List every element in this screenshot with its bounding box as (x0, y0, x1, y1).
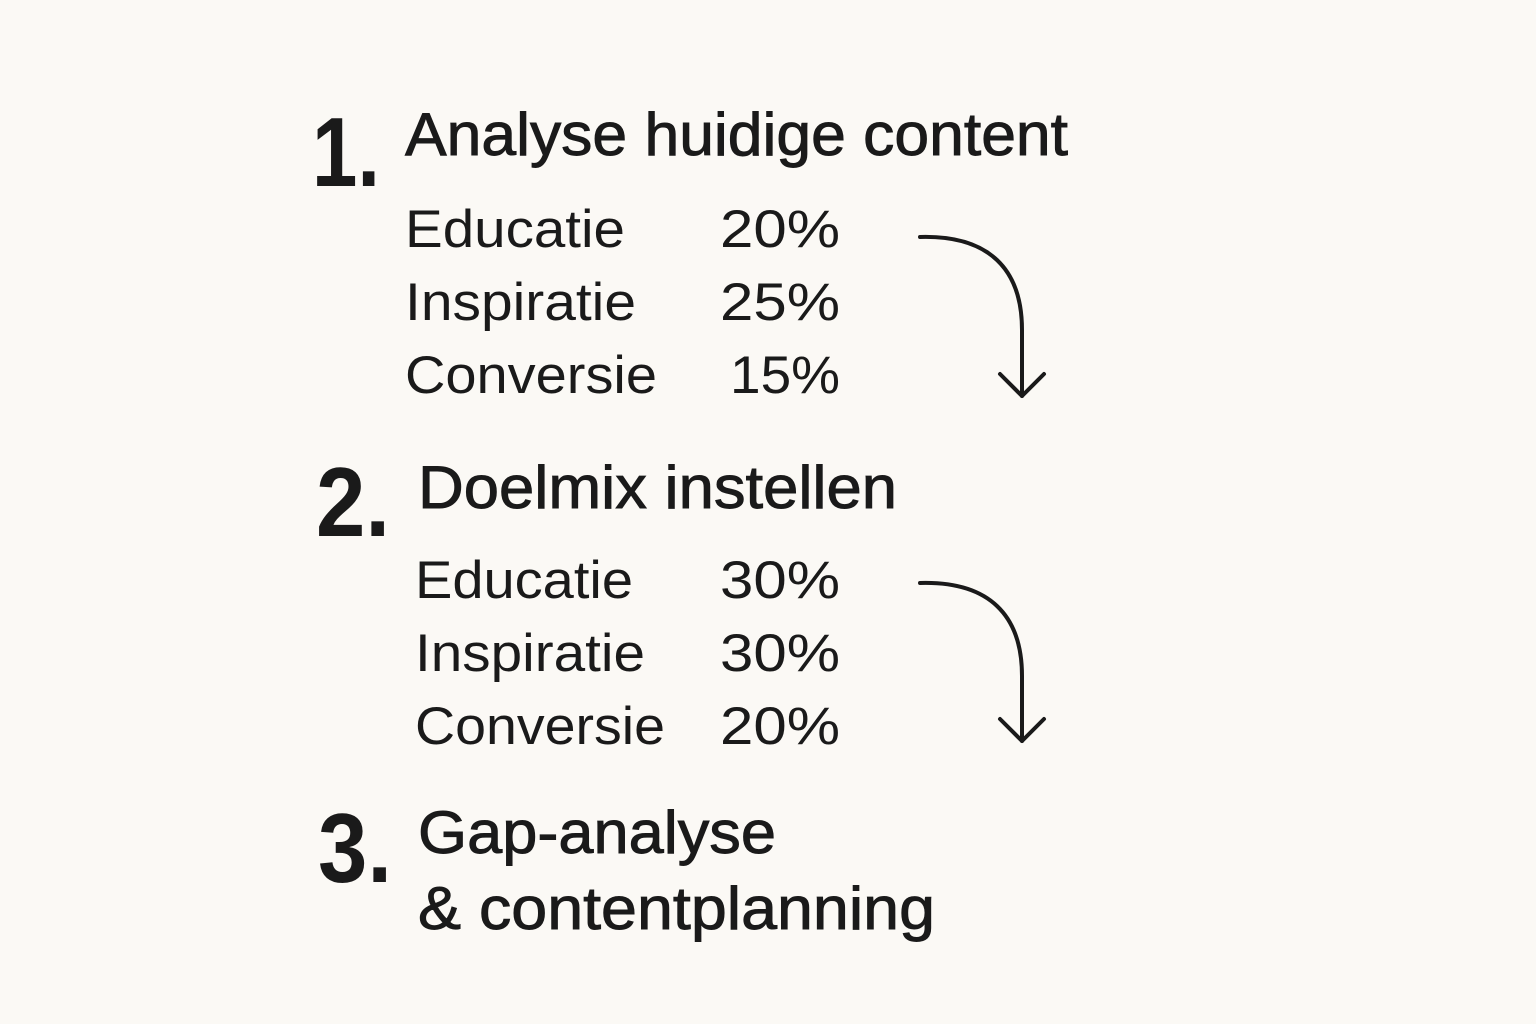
target mix rows (415, 551, 840, 756)
number 1: 1. (312, 97, 380, 207)
number 3: 3. (318, 793, 392, 903)
current mix rows: Educatie (405, 200, 625, 259)
target mix rows: Conversie (415, 697, 665, 756)
step 1 (312, 97, 1068, 405)
heading 3: Gap-analyse (418, 799, 776, 866)
heading 1: Analyse huidige content (405, 101, 1068, 168)
current mix rows: Conversie (405, 346, 657, 405)
current mix rows: Inspiratie (405, 273, 636, 332)
step 3: & contentplanning (418, 875, 935, 942)
current mix rows: 15% (730, 346, 840, 405)
current mix rows: 25% (720, 273, 840, 332)
number 2: 2. (316, 447, 390, 557)
arrow 1 (920, 237, 1044, 396)
current mix rows: 20% (720, 200, 840, 259)
heading 2: Doelmix instellen (418, 454, 897, 521)
target mix rows: 30% (720, 551, 840, 610)
target mix rows: 20% (720, 697, 840, 756)
current mix rows (405, 200, 840, 405)
arrow 2 (920, 583, 1044, 741)
step 2 (316, 447, 897, 756)
target mix rows: 30% (720, 624, 840, 683)
step 3 (318, 793, 935, 942)
target mix rows: Educatie (415, 551, 633, 610)
target mix rows: Inspiratie (415, 624, 645, 683)
